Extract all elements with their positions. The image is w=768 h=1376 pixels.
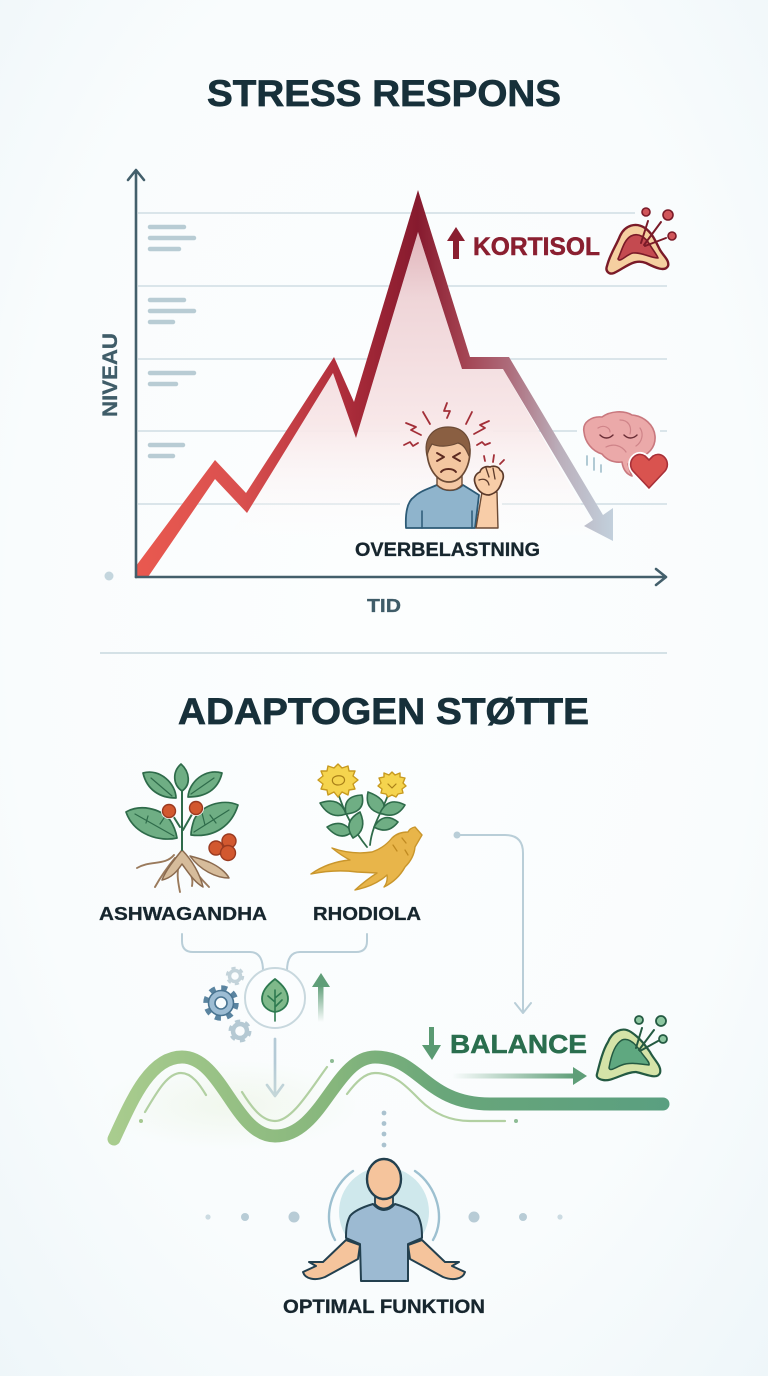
icon: balanced adrenal gland [597,1016,667,1080]
leaves [320,792,405,838]
x axis arrow [136,569,666,585]
label: kortisol with up arrow: KORTISOL [473,233,600,261]
berries [161,800,236,860]
raised arm and fist [476,492,498,528]
wave: balanced stress curve [100,1057,663,1150]
head [427,440,470,482]
leaves [126,764,238,839]
connector: plants to leaf circle [182,934,367,971]
arrow: connector to balance [454,832,531,1013]
label: overbelastning: OVERBELASTNING [355,540,540,561]
torso [346,1204,422,1281]
y axis label: NIVEAU [99,333,122,417]
thin inner wave [145,1067,505,1121]
arrow: green down [422,1027,441,1060]
icon: rhodiola plant [311,764,422,890]
arms [303,1240,360,1279]
panel: stress response chart [99,170,667,616]
label: ashwagandha: ASHWAGANDHA [99,903,267,924]
stem [170,790,195,850]
stress sparks [404,403,504,464]
x axis label: TID [367,596,401,616]
shirt [406,485,479,528]
neck [375,1194,393,1208]
label: balance: BALANCE [450,1029,587,1059]
legend placeholder bars [150,227,194,456]
decorative dots row [205,1212,563,1222]
grid lines [138,213,667,504]
label: kortisol with up arrow [447,227,600,261]
icon: gears [206,969,249,1040]
stress curve with arrow [136,190,613,577]
stems [338,793,388,847]
head [367,1159,401,1199]
flowers [318,764,406,797]
roots [137,855,209,892]
halo [339,1167,429,1257]
icon: ashwagandha plant [126,764,238,892]
root [311,827,422,890]
arrow: green right [452,1067,587,1085]
arrow: green up [312,973,330,1022]
title: stress respons: STRESS RESPONS [207,73,561,114]
divider [100,652,667,654]
hair [426,427,470,456]
icon: stressed adrenal gland [606,208,676,274]
icon: leaf in circle [245,968,305,1028]
heart [631,454,667,488]
icon: calm person [303,1159,465,1281]
area under curve [190,232,596,577]
icon: tired brain with heart [584,412,667,488]
icon: up arrow [447,227,465,259]
icon: stressed person [404,403,504,528]
y axis arrow [128,170,144,577]
brain [584,412,655,476]
arrow: leaf circle down to wave [267,1039,283,1096]
label: optimal funktion: OPTIMAL FUNKTION [283,1297,485,1318]
origin dot [104,572,114,580]
motion lines [587,456,601,472]
label: rhodiola: RHODIOLA [313,903,421,924]
dotted connector to person [382,1111,386,1147]
thick main wave [114,1057,663,1139]
face features [437,453,460,472]
neck [437,474,462,490]
title: adaptogen støtte: ADAPTOGEN STØTTE [178,691,589,732]
aura arcs [329,1171,439,1240]
